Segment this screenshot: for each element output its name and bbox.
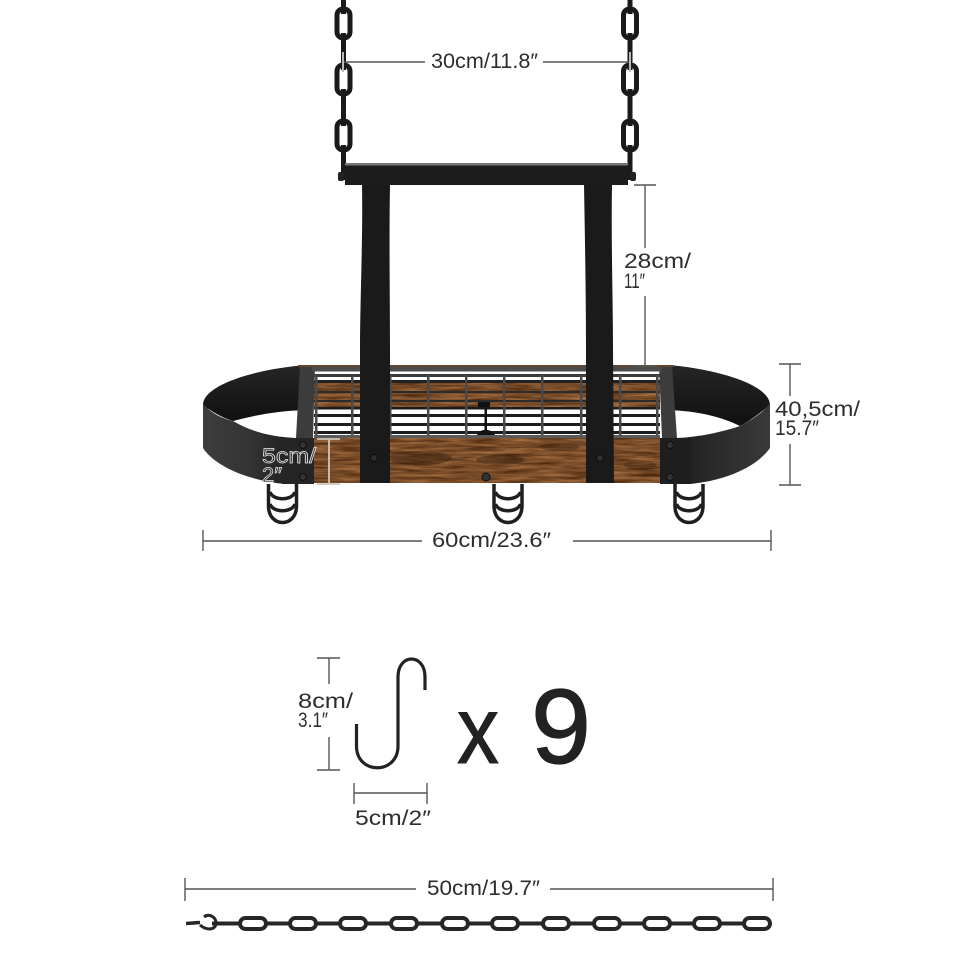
arm rivets [370,454,604,462]
dimension: board height 5cm: 5cm/ [262,445,316,468]
dimension: arm height 28cm [624,185,691,366]
front curved bands [203,403,770,484]
dimension: arm height 28cm: 28cm/ [624,250,691,273]
dimension: chain spacing 30cm: 30cm/11.8″ [431,50,539,73]
dimension: chain spacing 30cm [343,50,630,73]
dimension: chain length 50cm: 50cm/19.7″ [427,877,541,900]
right hanging chain [624,0,636,181]
dimension: width 60cm: 60cm/23.6″ [432,529,552,552]
dimension: hook width 5cm: 5cm/2″ [355,807,432,830]
quantity: x 9: x [457,677,499,784]
dimension: hook width 5cm [354,783,432,830]
dimension: board height 5cm [262,439,340,487]
dimension: hook height 8cm [298,658,353,770]
pot rack product illustration [203,0,770,522]
front wood board [314,438,660,483]
quantity: x 9: 9 [531,668,591,786]
side frame posts and top rail [296,365,677,438]
dimension: width 60cm [203,529,771,552]
icon: S hook [356,659,425,768]
dimension: hook height 8cm: 3.1″ [298,709,328,732]
back curved bands [203,365,770,426]
left upright arm [360,185,390,483]
dimension: depth 40,5cm: 15.7″ [775,417,820,440]
dimension: arm height 28cm: 11″ [624,270,645,293]
hanging pan hooks [268,484,703,522]
right upright arm [584,185,614,483]
chain with end hook [186,915,770,929]
dimension: chain length 50cm [185,877,773,901]
back wood slats and wire grid [314,371,660,435]
dimension: depth 40,5cm [775,364,860,485]
dimension: board height 5cm: 2″ [262,464,283,487]
top crossbar [345,163,628,185]
quantity: x 9 [457,668,591,786]
dimension: hook height 8cm: 8cm/ [298,690,353,713]
S hook accessory [298,658,591,830]
corner plates [282,438,691,484]
extension chain [185,877,773,929]
dimension: depth 40,5cm: 40,5cm/ [775,398,860,421]
left hanging chain [337,0,350,181]
